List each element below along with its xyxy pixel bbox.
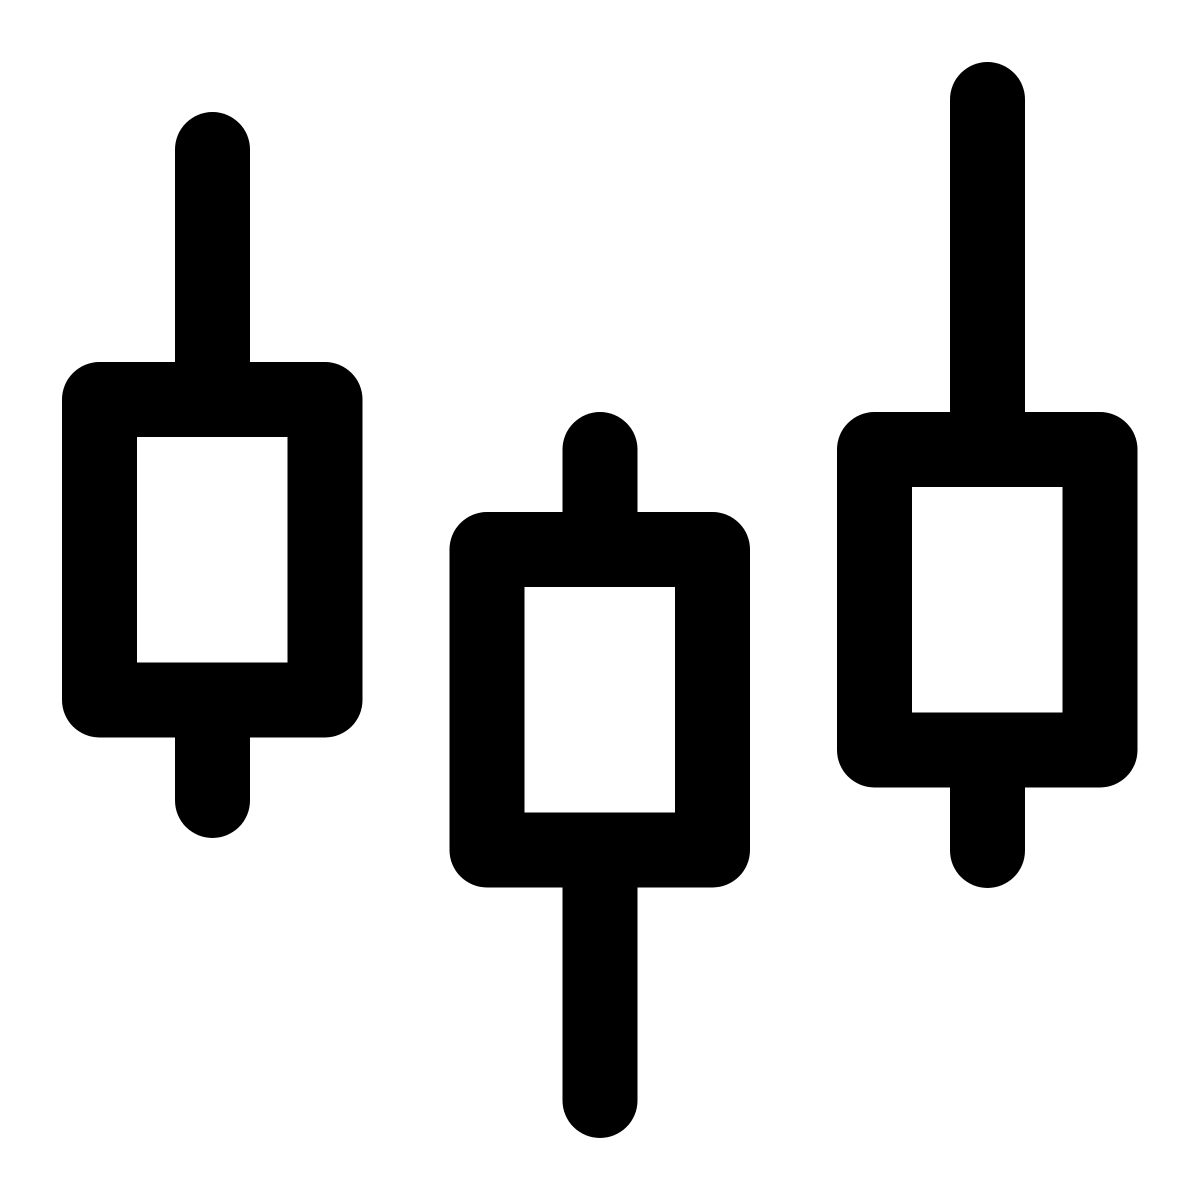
right candlestick bbox=[874, 100, 1100, 850]
middle candlestick bbox=[487, 450, 712, 1100]
left candlestick bbox=[100, 150, 325, 800]
